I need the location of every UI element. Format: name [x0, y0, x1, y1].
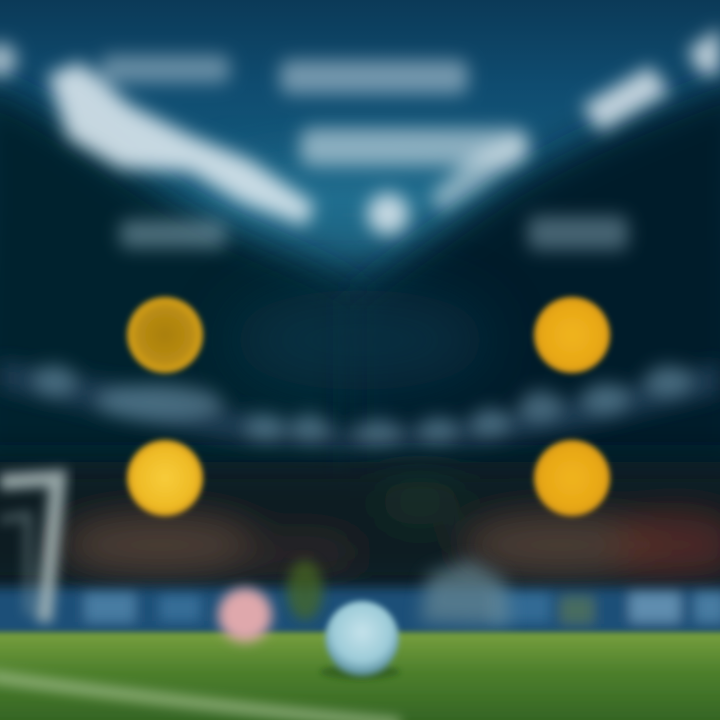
goal post [0, 478, 58, 622]
icon: gold circle bottom right [534, 440, 610, 516]
football [320, 601, 400, 680]
icon: gold circle bottom left [127, 440, 203, 516]
far player silhouette [287, 560, 323, 620]
lower crowd [0, 462, 720, 592]
band of stadium lights [0, 360, 720, 454]
dark stands left [0, 80, 370, 480]
blurred headline shapes [0, 28, 720, 235]
blue advertising boards [0, 588, 720, 638]
pitch line [0, 676, 400, 720]
icon: gold circle top left [127, 297, 203, 373]
blurred column labels [120, 216, 628, 250]
central glow [190, 165, 510, 265]
pitch [0, 632, 720, 720]
grey structure [420, 560, 510, 625]
dark stands right [350, 75, 720, 480]
icon: gold circle top right [534, 297, 610, 373]
pink ball [218, 588, 272, 642]
central stand haze [230, 290, 490, 390]
